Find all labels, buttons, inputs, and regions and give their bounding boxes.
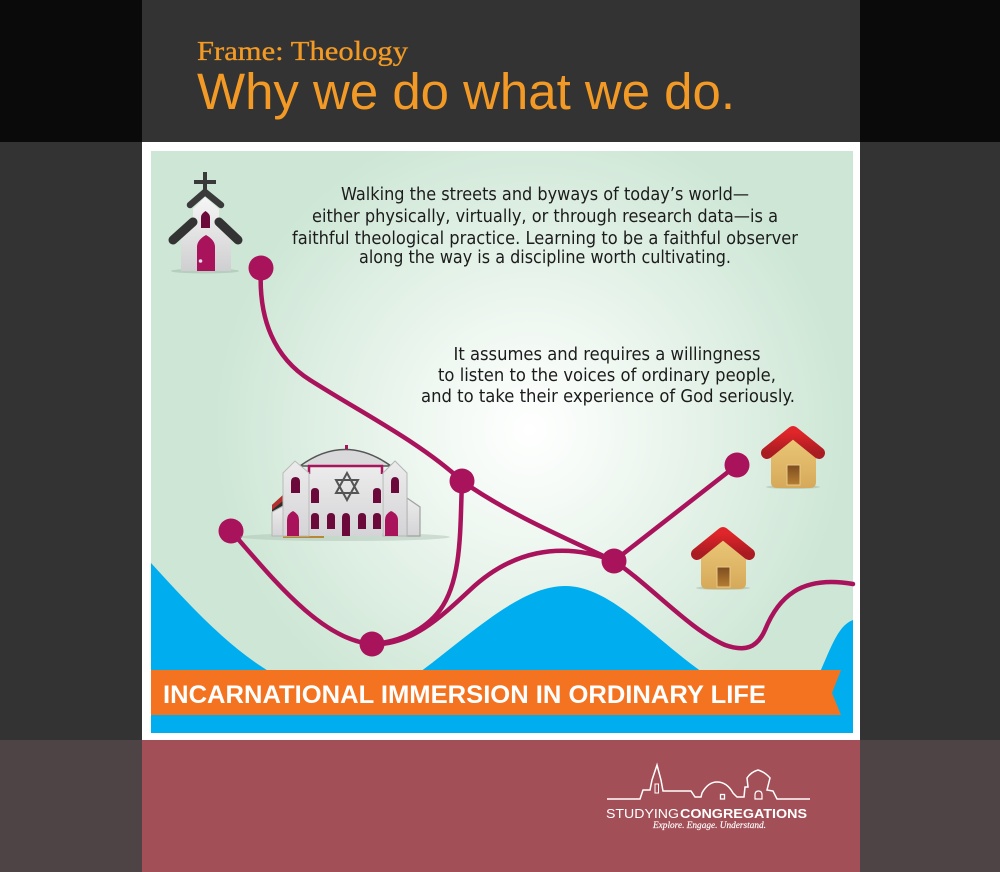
blue hills <box>151 563 853 733</box>
text block: intro: faithful theological practice. Learning to be a faithful observer <box>292 229 799 249</box>
text block: intro: Walking the streets and byways of today’s world— <box>341 185 749 205</box>
title: Why we do what we do. <box>197 63 735 120</box>
text block: willingness <box>421 345 795 407</box>
node circles <box>218 256 750 656</box>
text block: intro: either physically, virtually, or through research data—is a <box>312 207 778 227</box>
text block: intro: along the way is a discipline worth cultivating. <box>359 248 731 268</box>
icon: lower house <box>696 533 750 590</box>
icon: synagogue <box>240 445 450 541</box>
heading: Frame: Theology: Frame: Theology <box>197 36 409 66</box>
icon: upper house <box>766 432 820 489</box>
banner <box>151 670 841 715</box>
paths network <box>218 256 853 656</box>
banner: INCARNATIONAL IMMERSION IN ORDINARY LIFE <box>163 681 766 709</box>
logo: Studying Congregations <box>606 765 810 830</box>
icon: church <box>171 172 239 274</box>
text block: willingness: It assumes and requires a willingness <box>454 345 760 365</box>
logo: Studying Congregations: Explore. Engage. Understand. <box>652 820 766 830</box>
panel: main illustration <box>142 142 860 740</box>
text block: willingness: to listen to the voices of ordinary people, <box>438 366 776 386</box>
text block: willingness: and to take their experience of God seriously. <box>421 387 795 407</box>
text block: intro <box>292 185 799 268</box>
logo: Studying Congregations: CONGREGATIONS <box>680 807 807 821</box>
header <box>197 36 735 120</box>
logo: Studying Congregations: STUDYING <box>606 807 679 821</box>
